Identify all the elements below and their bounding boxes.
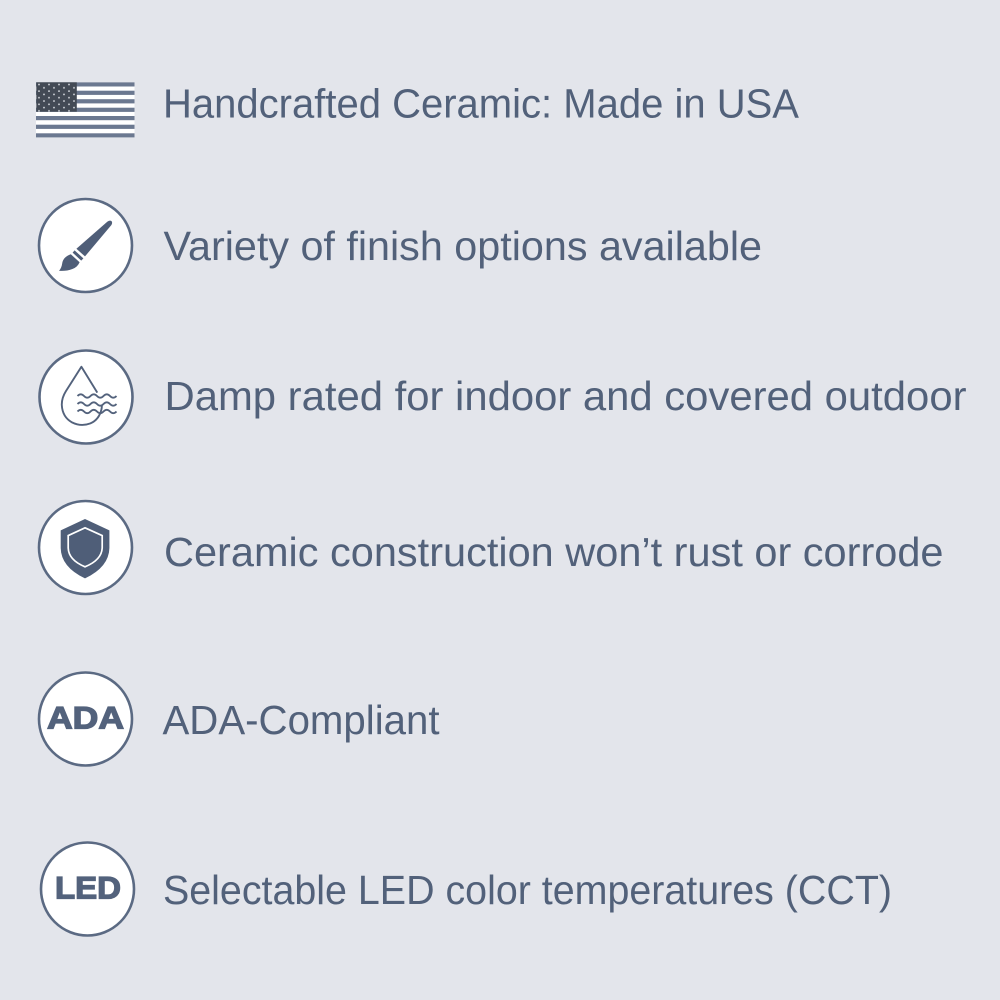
- icon: paint brush: [39, 199, 132, 292]
- icon: LED badge: [41, 842, 134, 936]
- text: ADA compliant: ADA-Compliant: [162, 697, 440, 743]
- icon: ADA badge: [39, 672, 132, 766]
- icon: LED badge: LED: [55, 869, 121, 905]
- text: handcrafted ceramic: Handcrafted Ceramic: Made in USA: [163, 81, 799, 127]
- icon: american flag: [36, 82, 134, 138]
- icon: water drop with waves: [40, 350, 132, 444]
- text: ceramic construction: Ceramic construction won’t rust or corrode: [164, 529, 944, 575]
- text: damp rated: Damp rated for indoor and covered outdoor: [164, 373, 966, 419]
- text: selectable LED: Selectable LED color temperatures (CCT): [163, 867, 892, 913]
- icon: ADA badge: ADA: [47, 699, 124, 735]
- text: finish options: Variety of finish options available: [164, 223, 762, 269]
- icon: shield: [39, 501, 132, 594]
